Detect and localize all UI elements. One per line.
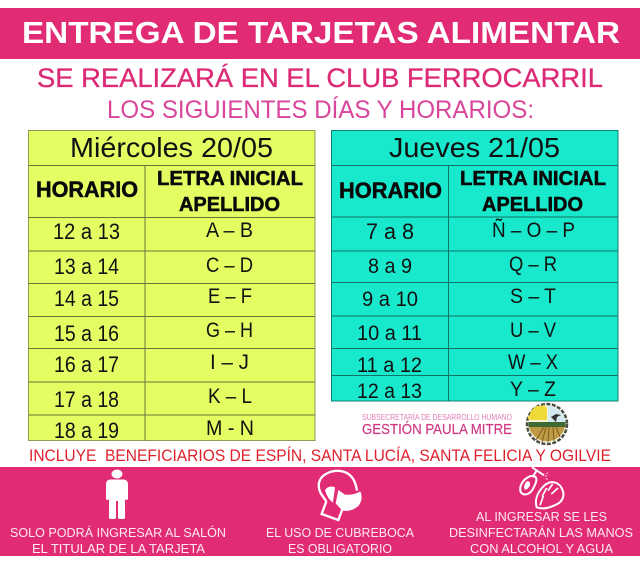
Thursday hours: 8 a 9	[368, 255, 412, 278]
Wednesday column headers	[36, 168, 303, 216]
panel: footer requirements	[0, 467, 640, 556]
Wednesday letters: E – F	[208, 285, 252, 308]
text: hands disinfected: DESINFECTARÁN LAS MANOS	[449, 525, 633, 540]
Thursday hours	[357, 219, 422, 403]
Thursday letters: Y – Z	[510, 378, 556, 401]
Wednesday letters: G – H	[206, 319, 253, 342]
Wednesday letters: A – B	[206, 219, 253, 242]
text: card holder only: EL TITULAR DE LA TARJETA	[32, 541, 205, 556]
Thursday letters: Q – R	[509, 253, 557, 276]
text: mask mandatory: EL USO DE CUBREBOCA	[266, 525, 414, 540]
Wednesday letters: I – J	[210, 351, 249, 374]
Thursday hours: 12 a 13	[357, 380, 422, 403]
Thursday hours: 10 a 11	[357, 322, 422, 345]
Thursday column headers: LETRA INICIAL	[460, 168, 606, 190]
Thursday hours: 7 a 8	[366, 219, 414, 244]
Wednesday hours: 12 a 13	[53, 219, 120, 244]
logo text: Gestión Paula Mitre	[362, 413, 512, 438]
subtitle: days and times: LOS SIGUIENTES DÍAS Y HORARIOS:	[107, 95, 534, 124]
logo text: Gestión Paula Mitre: GESTIÓN PAULA MITRE	[362, 421, 512, 438]
icon: municipal emblem	[527, 404, 567, 444]
Thursday column headers: HORARIO	[339, 178, 442, 203]
subtitle: venue: SE REALIZARÁ EN EL CLUB FERROCARRIL	[37, 63, 603, 93]
Wednesday column headers: APELLIDO	[179, 194, 280, 216]
icon: head with face mask	[319, 471, 362, 520]
Thursday letters: U – V	[510, 319, 556, 342]
icon: person	[106, 470, 128, 519]
Thursday heading: Jueves 21/05	[389, 132, 560, 163]
Wednesday heading: Miércoles 20/05	[70, 132, 273, 163]
Wednesday hours: 13 a 14	[54, 254, 119, 279]
Thursday letters: W – X	[508, 351, 558, 374]
text: hands disinfected: CON ALCOHOL Y AGUA	[470, 541, 613, 556]
Thursday letters: S – T	[510, 285, 556, 308]
Wednesday letters	[206, 219, 254, 440]
Wednesday hours: 16 a 17	[54, 352, 119, 377]
Wednesday letters: K – L	[208, 385, 252, 408]
Wednesday column headers: HORARIO	[36, 177, 138, 202]
panel: Wednesday schedule table	[28, 130, 315, 443]
Wednesday hours: 18 a 19	[54, 418, 119, 443]
text: hands disinfected: AL INGRESAR SE LES	[476, 509, 607, 524]
Thursday column headers	[339, 168, 606, 216]
text: card holder only	[10, 525, 226, 556]
text: hands disinfected	[449, 509, 633, 556]
Thursday letters	[492, 218, 575, 401]
Wednesday letters: C – D	[206, 254, 253, 277]
Wednesday hours: 14 a 15	[54, 286, 119, 311]
Thursday hours: 11 a 12	[357, 354, 422, 377]
text: mask mandatory: ES OBLIGATORIO	[288, 541, 392, 556]
Wednesday hours: 17 a 18	[54, 387, 119, 412]
panel: Thursday schedule table	[332, 130, 618, 403]
logo text: Gestión Paula Mitre: SUBSECRETARÍA DE DESARROLLO HUMANO	[362, 413, 512, 422]
Thursday hours: 9 a 10	[362, 288, 418, 311]
Wednesday hours	[53, 219, 120, 443]
icon: sanitizer spray and hands	[520, 467, 563, 508]
text: card holder only: SOLO PODRÁ INGRESAR AL SALÓN	[10, 525, 226, 540]
title banner	[0, 8, 640, 59]
title banner: ENTREGA DE TARJETAS ALIMENTAR	[22, 15, 620, 50]
Thursday letters: Ñ – O – P	[492, 218, 575, 242]
notice: included beneficiaries: INCLUYE BENEFICIARIOS DE ESPÍN, SANTA LUCÍA, SANTA FELICIA Y OGILVIE	[29, 446, 611, 465]
Wednesday letters: M - N	[206, 417, 254, 440]
text: mask mandatory	[266, 525, 414, 556]
Thursday column headers: APELLIDO	[482, 194, 583, 216]
Wednesday hours: 15 a 16	[54, 321, 119, 346]
Wednesday column headers: LETRA INICIAL	[157, 168, 303, 190]
